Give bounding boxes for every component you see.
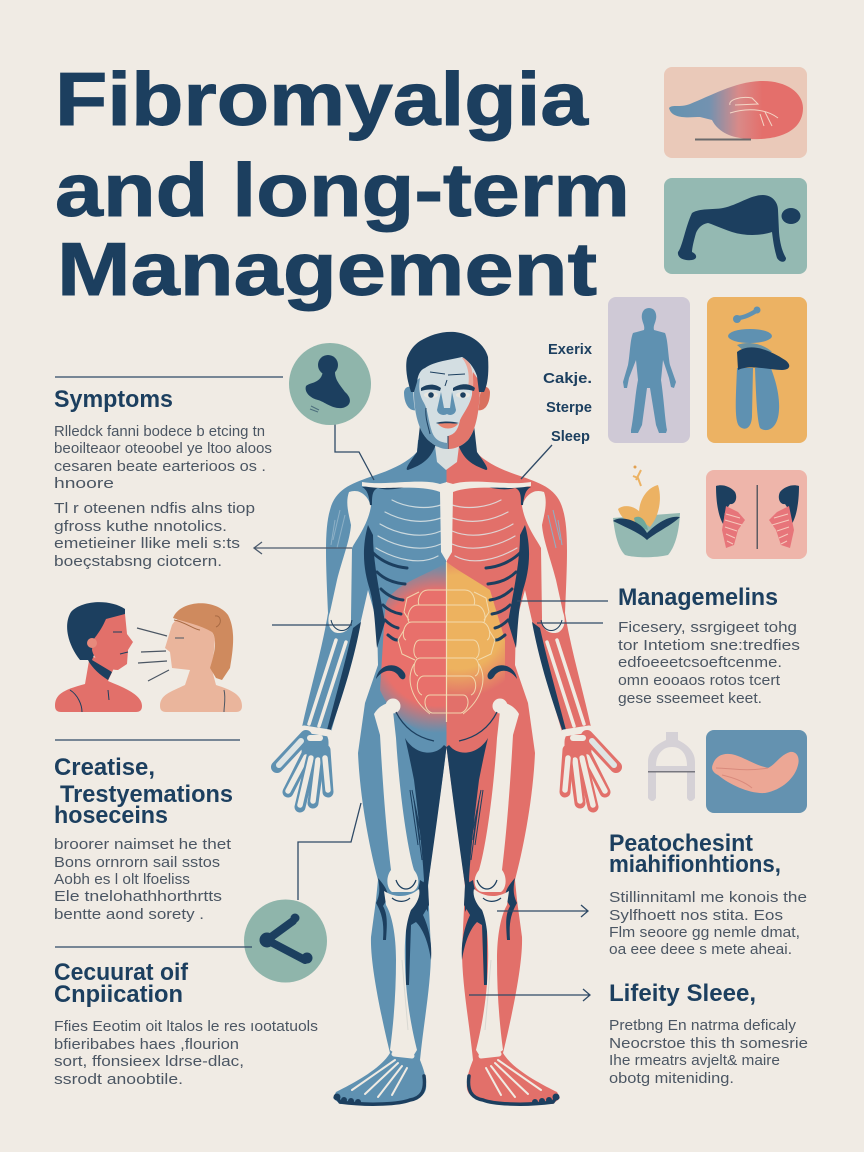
panel: treatment text: bentte aond sorety . — [54, 906, 204, 923]
side labels — [543, 341, 593, 445]
panel: complication text: ssrodt anoobtile. — [54, 1071, 183, 1088]
abdomen pink gradient — [380, 562, 446, 735]
panel: symptoms text: gfross kuthe nnotolics. — [54, 518, 227, 535]
left half of body — [302, 440, 446, 1104]
panel: management text — [618, 584, 800, 707]
panel: treatment text: Bons ornrorn sail sstos — [54, 854, 220, 871]
head — [404, 332, 490, 470]
panel: medication text: Flm seoore gg nemle dmat, — [609, 924, 800, 941]
panel: complication text: Ffies Eeotim oit ltalos le res ıootatuols — [54, 1018, 318, 1035]
side labels: Sleep — [551, 428, 590, 445]
panel: lifestyle sleep text: Lifeity Sleee, — [609, 980, 756, 1007]
line: elbow right — [537, 622, 603, 624]
panel: medication text: miahifionhtions, — [609, 851, 781, 878]
panel: complication text — [54, 947, 318, 1088]
body figure — [277, 332, 616, 1105]
side labels: Sterpe — [546, 399, 592, 416]
line: elbow left — [272, 624, 352, 626]
panel: management text: Managemelins — [618, 584, 778, 611]
speech lines — [137, 628, 169, 681]
line: torso to management — [517, 600, 608, 602]
icon: circle with bone — [244, 900, 327, 982]
side labels: Cakje. — [543, 370, 592, 387]
icon: plant in bowl — [613, 466, 680, 557]
panel: treatment text: Aobh es l olt lfoeliss — [54, 871, 190, 888]
panel: treatment text: Ele tnelohathhorthrtts — [54, 888, 222, 905]
man — [55, 602, 142, 712]
panel: symptoms text: Rlledck fanni bodece b etcing tn — [54, 423, 265, 440]
woman — [160, 603, 242, 712]
panel: complication text: Cecuurat oif — [54, 959, 189, 986]
panel: lifestyle sleep text: Pretbng En natrma deficaly — [609, 1017, 797, 1034]
panel: symptoms text — [54, 377, 283, 570]
panel: symptoms text: beoilteaor oteoobel ye ltoo aloos — [54, 440, 272, 457]
panel: body silhouette icon — [608, 297, 690, 443]
panel: mirrored anatomy icon — [706, 470, 807, 559]
leader line: sleep label — [521, 445, 552, 479]
side labels: Exerix — [548, 341, 593, 358]
panel: treatment text: Creatise, — [54, 754, 155, 781]
panel: medication text: Peatochesint — [609, 830, 753, 857]
icon: grey brace — [648, 732, 695, 801]
panel: medication text — [609, 830, 807, 958]
abdomen orange gradient — [446, 562, 505, 722]
panel: management text: edfoeeetcsoeftcenme. — [618, 654, 782, 671]
panel: management text: tor Intetiom sne:tredfies — [618, 637, 800, 654]
panel: lifestyle sleep text: Ihe rmeatrs avjelt& maire — [609, 1052, 780, 1069]
illustration: two faces talking — [55, 602, 242, 712]
abdomen midline — [446, 562, 448, 722]
panel: treatment text — [54, 740, 240, 923]
arrow: shin to medication text — [497, 905, 588, 917]
panel: complication text: Cnpiication — [54, 981, 183, 1008]
title: and long-term — [55, 148, 630, 232]
panel: lifestyle sleep text: obotg miteniding. — [609, 1070, 734, 1087]
panel: tongue-shaped muscle icon — [664, 67, 807, 158]
panel: symptoms text: cesaren beate earterioos os . — [54, 458, 266, 475]
panel: symptoms text: emetieiner llike meli s:ts — [54, 535, 240, 552]
panel: medication text: Stillinnitaml me konois the — [609, 889, 807, 906]
panel: lifestyle sleep text — [609, 980, 808, 1087]
panel: treatment text: Trestyemations — [60, 781, 233, 808]
title — [55, 57, 630, 311]
icon: circle with blob — [289, 343, 371, 425]
panel: medication text: Sylfhoett nos stita. Eos — [609, 907, 783, 924]
panel: orange posture icon — [707, 297, 807, 443]
panel: treatment text: broorer naimset he thet — [54, 836, 232, 853]
leader line: bone circle to thigh — [298, 803, 361, 900]
panel: complication text: bfieribabes haes ,flourion — [54, 1036, 239, 1053]
arrow: lower leg to lifestyle text — [469, 989, 590, 1001]
panel: lifestyle sleep text: Neocrstoe this th somesrie — [609, 1035, 808, 1052]
panel: plank exercise icon — [664, 178, 807, 274]
right anatomy detail — [446, 482, 616, 1105]
panel: hand icon — [706, 730, 807, 813]
arrow: symptoms to arm — [254, 542, 352, 554]
panel: symptoms text: boeçstabsng ciotcern. — [54, 553, 222, 570]
panel: management text: gese sseemeet keet. — [618, 690, 762, 707]
leader line: shoulder to circle icon — [335, 416, 374, 480]
panel: symptoms text: hnoore — [54, 475, 114, 492]
right half of body — [446, 440, 591, 1104]
panel: symptoms text: Symptoms — [54, 386, 173, 413]
panel: symptoms text: Tl r oteenen ndfis alns tiop — [54, 500, 255, 517]
panel: complication text: sort, ffonsieex ldrse-dlac, — [54, 1053, 244, 1070]
panel: treatment text: hoseceins — [54, 802, 168, 829]
panel: management text: omn eooaos rotos tcert — [618, 672, 781, 689]
panel: medication text: oa eee deee s mete aheai. — [609, 941, 792, 958]
left anatomy detail — [277, 482, 447, 1105]
title: Fibromyalgia — [55, 57, 589, 141]
panel: management text: Ficesery, ssrgigeet tohg — [618, 619, 797, 636]
title: Management — [57, 227, 597, 311]
